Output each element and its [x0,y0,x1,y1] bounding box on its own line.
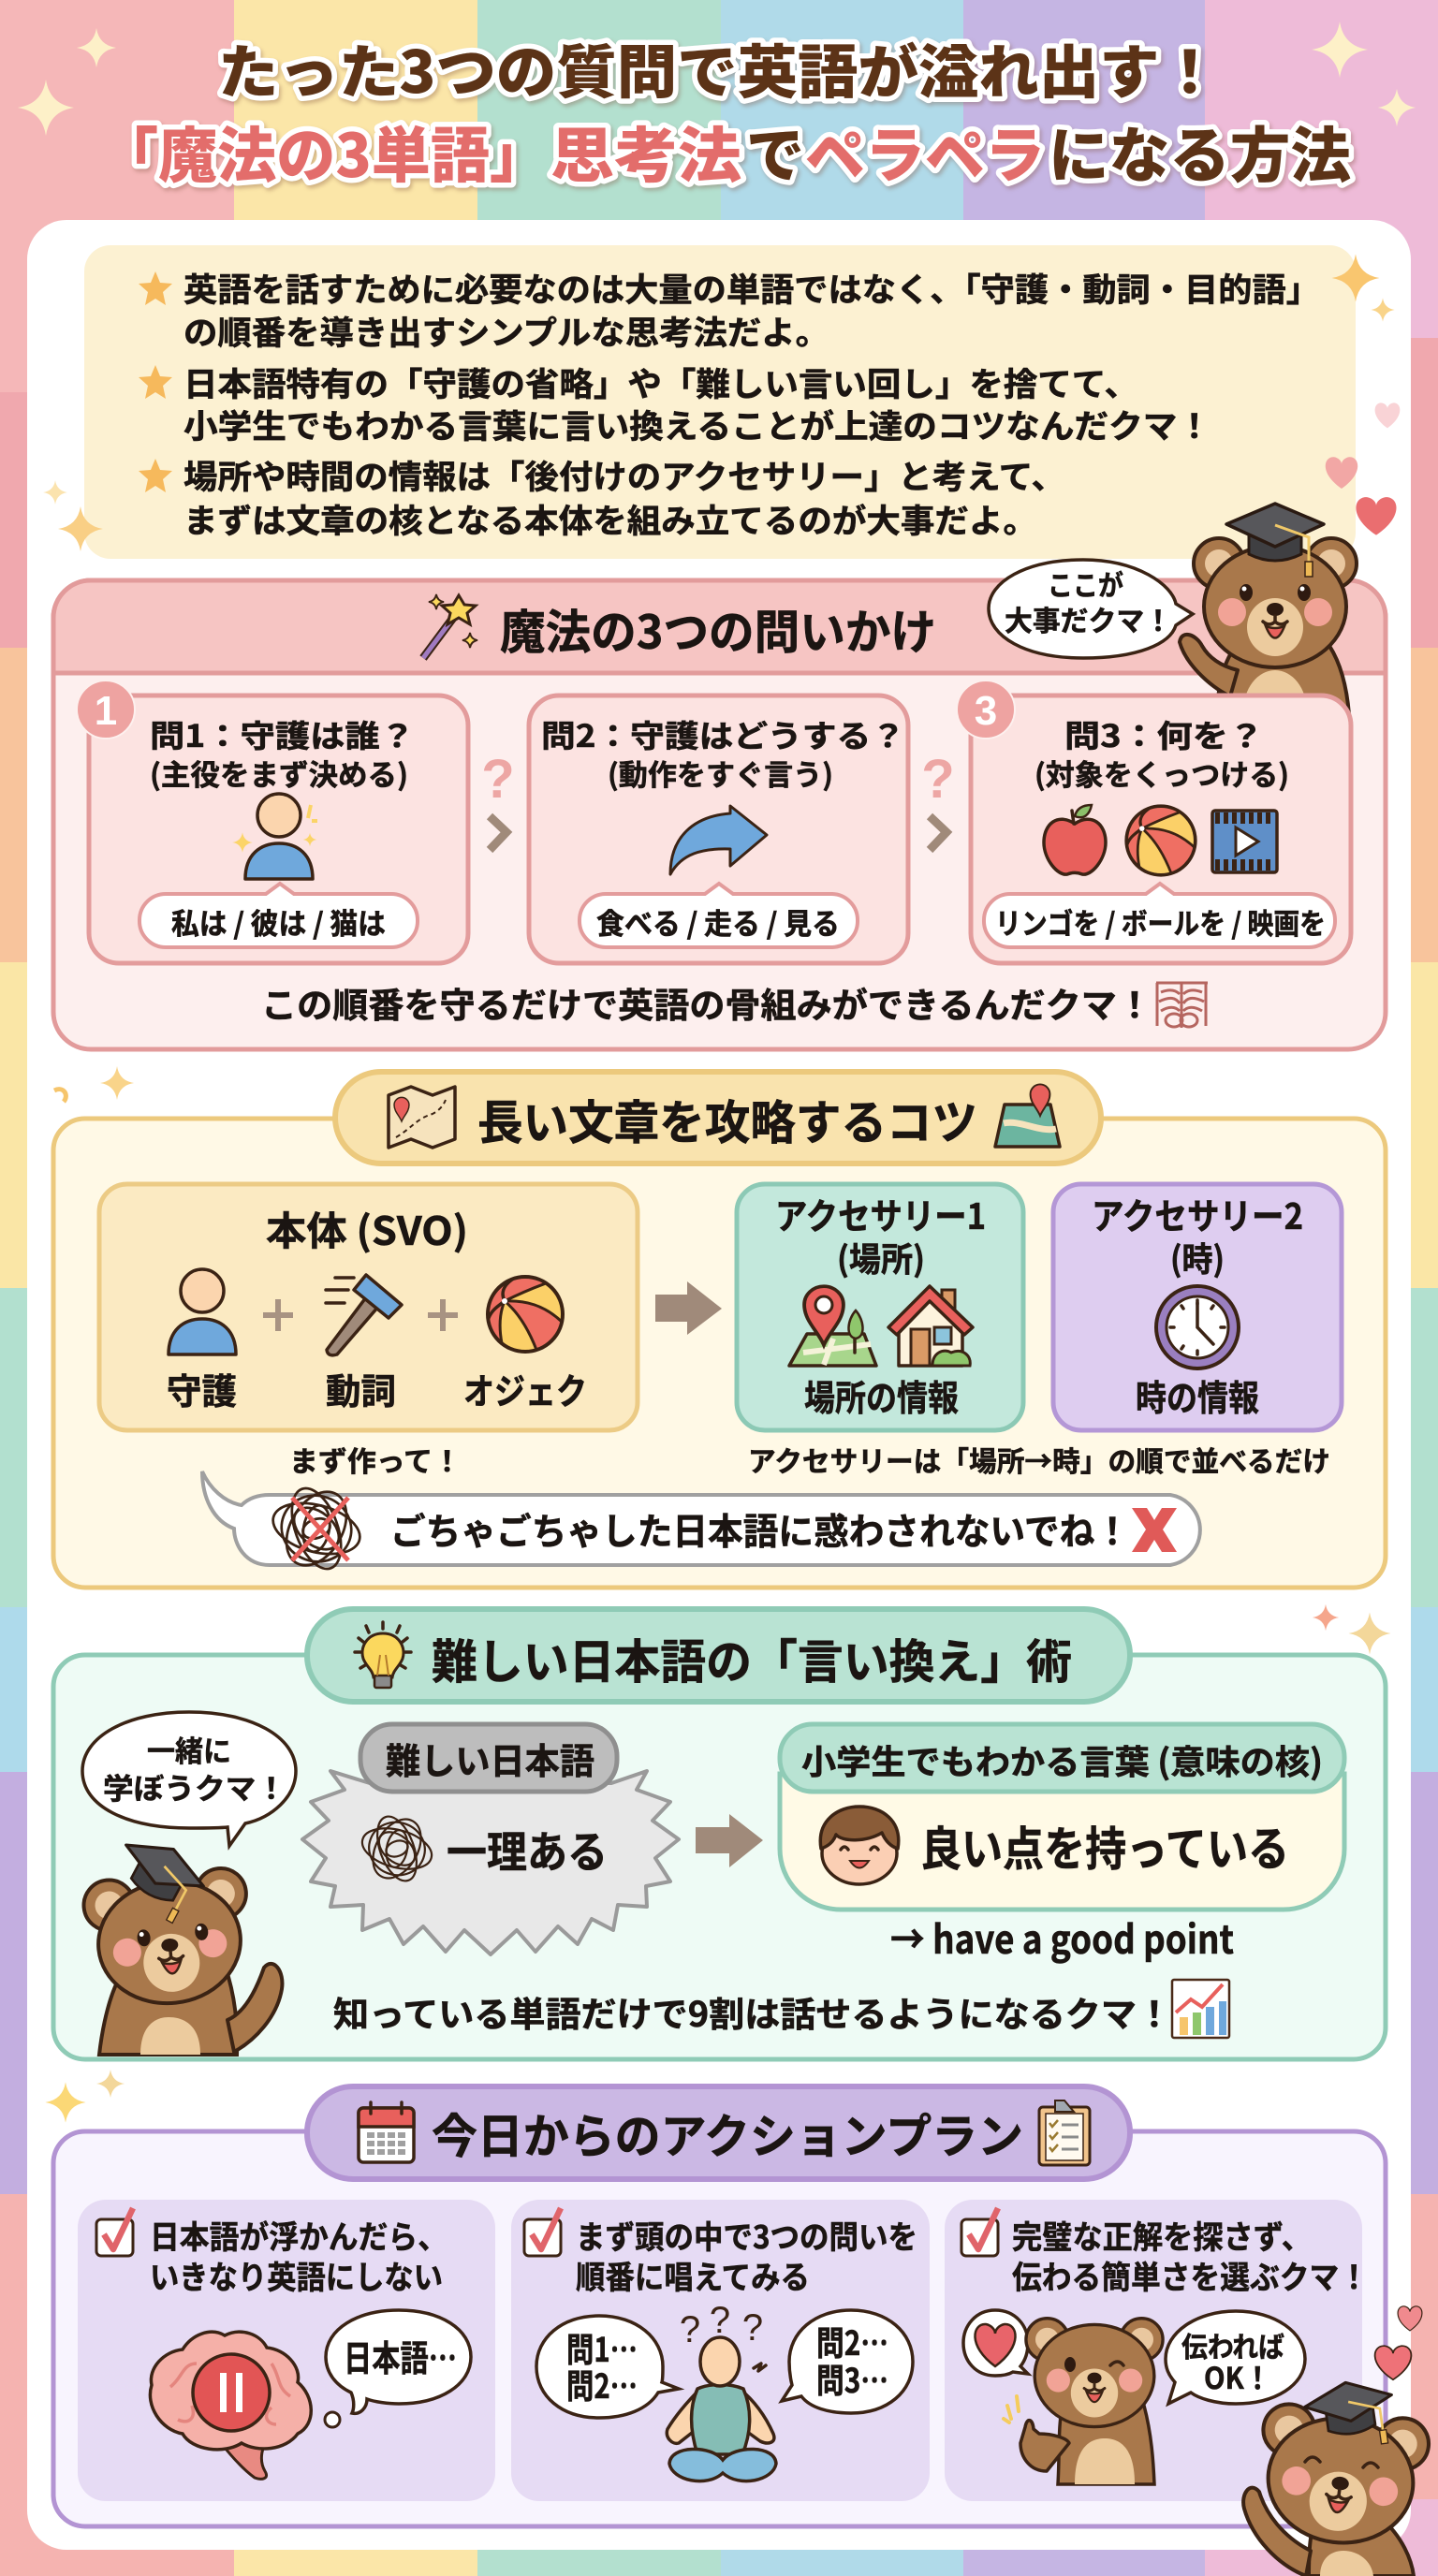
icon: meditating person [667,2300,776,2481]
icon: meditating person: ? [742,2307,763,2349]
icon: crossed tangle [268,1481,365,1576]
icon: skeleton [1156,983,1208,1028]
card: question 1 [77,681,468,963]
heart bubble [963,2310,1028,2376]
answer pill: 私は / 彼は / 猫は [171,900,386,943]
bear 4 [1004,2319,1163,2484]
icon: child face [820,1807,899,1884]
card: action 1: いきなり英語にしない [150,2252,443,2298]
speech callout: tangled japanese [202,1471,1200,1576]
bubble right [782,2310,913,2413]
bullet 1: 英語を話すために必要なのは大量の単語ではなく、「守護・動詞・目的語」 [183,264,1320,312]
icon: red x [1132,1508,1177,1552]
icon: folded map [389,1087,455,1148]
question text: 問1：守護は誰？ [150,711,415,756]
number badge 1 [77,681,135,739]
card: action 2: 順番に唱えてみる [576,2252,810,2298]
arrow: body to accessory [655,1281,722,1335]
title: たった3つの質問で英語が溢れ出す！ [218,25,1220,110]
speech bubble: ここが大事だクマ: ここが [1048,563,1123,604]
thought bubble [325,2310,471,2427]
bubble: OK: 伝われば [1181,2324,1284,2365]
connector 2: ? [921,749,955,810]
english phrase: → have a good point [890,1909,1234,1966]
connector 1: ? [481,749,515,810]
panel 3 takeaway: 知っている単語だけで9割は話せるようになるクマ！ [333,1986,1172,2037]
question text: 問2：守護はどうする？ [541,711,905,756]
action text: 完璧な正解を探さず、 [1012,2212,1312,2258]
labels: 守護 [167,1363,237,1414]
panel: rephrasing [53,1609,1386,2059]
box: main body SVO [99,1184,638,1430]
box: accessory 2 time: (時) [1170,1233,1225,1281]
floating hearts [1375,2306,1422,2379]
speech bubble: ここが大事だクマ: 大事だクマ！ [1005,598,1172,639]
easy word box: 良い点を持っている [920,1812,1289,1880]
icon: meditating person: ? [680,2309,700,2350]
pill: difficult japanese [360,1724,617,1792]
box: accessory 2 time: アクセサリー2 [1092,1188,1303,1239]
icon: subject person [169,1269,236,1354]
spiky burst: difficult word: 一理ある [447,1819,608,1881]
answer pill: 食べる / 走る / 見る [596,900,840,943]
bullet 2 [139,359,1211,448]
decorative sparkle and swirl [54,1066,134,1102]
bullet 3: 場所や時間の情報は「後付けのアクセサリー」と考えて、 [183,451,1065,499]
icon: meditating person: ? [710,2300,730,2341]
icon: checkbox [961,2208,998,2256]
panel: action plan [53,2086,1386,2526]
speech bubble: learn together: 一緒に [147,1728,231,1770]
icon: tangle [358,1811,436,1886]
panel: long sentences [53,1072,1386,1588]
thought bubble: 日本語… [344,2330,457,2381]
card: action 3: 伝わる簡単さを選ぶクマ！ [1012,2252,1369,2298]
sparkles and hearts around summary [43,255,1400,551]
note: make first: まず作って！ [289,1439,462,1480]
panel heading: 魔法の3つの問いかけ [500,595,936,663]
decorative sparkles [1313,1604,1391,1655]
header pill [307,2086,1130,2179]
icon: growth chart [1172,1980,1229,2038]
action text: 日本語が浮かんだら、 [150,2212,448,2258]
icon: clipboard [1039,2100,1090,2165]
answer pill: リンゴを / ボールを / 映画を [995,900,1326,943]
plus [263,1299,293,1331]
answer pill [139,884,418,947]
plus [428,1299,458,1331]
heading: 今日からのアクションプラン [432,2100,1023,2167]
box: accessory 1 place [737,1184,1023,1430]
icon: clock [1156,1286,1239,1368]
icon: hammer [326,1275,402,1355]
answer pill [580,884,858,947]
bubble left [536,2316,679,2418]
bullet 2: 日本語特有の「守護の省略」や「難しい言い回し」を捨てて、 [183,359,1138,406]
number badge 3: 3 [975,688,997,734]
bullet 3 [139,451,1065,543]
title: 「魔法の3単語」 [99,109,549,195]
icon: ball [488,1277,563,1352]
question text: 問3：何を？ [1064,711,1264,756]
bear 3 [1243,2377,1431,2576]
number badge 1: 1 [95,688,117,734]
connector 2 [921,749,955,850]
icon: checkbox [96,2208,133,2256]
bear 2 [81,1829,282,2055]
box: main body SVO: 本体 (SVO) [266,1200,468,1257]
icon: arrow [670,806,767,874]
speech bubble: learn together: 学ぼうクマ！ [103,1765,286,1808]
arrow [696,1814,763,1867]
card: question 3: (対象をくっつける) [1034,752,1289,794]
bubble right: 問3… [816,2354,888,2403]
icon: map pin [995,1084,1060,1147]
box: accessory 1 place: 場所の情報 [804,1369,959,1421]
box: accessory 2 time: 時の情報 [1136,1369,1259,1421]
box: accessory 1 place: (場所) [837,1233,925,1281]
speech callout: tangled japanese: ごちゃごちゃした日本語に惑わされないでね！ [390,1503,1130,1556]
spiky burst: difficult word [302,1724,679,1954]
icon: film [1212,811,1277,872]
bear 1 [1180,504,1357,753]
box: main body SVO: 動詞 [326,1363,396,1414]
icon: checkbox [524,2208,561,2256]
card: question 2: (動作をすぐ言う) [608,752,833,794]
pill: easy words: 小学生でもわかる言葉 (意味の核) [801,1735,1323,1784]
card: action 1 [78,2200,495,2501]
icon: light bulb [355,1622,411,1688]
connector 1 [481,749,515,850]
header pill [335,1072,1101,1164]
number badge 3 [957,681,1015,739]
heading: 長い文章を攻略するコツ [477,1086,977,1153]
panel 1 takeaway: この順番を守るだけで英語の骨組みができるんだクマ！ [261,977,1152,1028]
panel header band [53,580,1386,673]
title: ペラペラ [805,109,1045,195]
bubble left: 問1… [566,2323,638,2372]
summary box [84,245,1356,559]
panel: magic questions [53,580,1386,1049]
action text: まず頭の中で3つの問いを [576,2212,917,2258]
card: question 2 [529,695,908,963]
icon: brain with pause [150,2332,311,2479]
card: question 1: (主役をまず決める) [150,752,408,794]
bubble: OK [1166,2311,1305,2404]
bubble left: 問2… [566,2360,638,2408]
title [99,25,1351,195]
bubble: OK: OK！ [1204,2355,1271,2398]
card: action 3 [945,2200,1369,2501]
icon: pin on map [789,1286,876,1366]
pill: easy words [780,1724,1344,1792]
box: main body SVO: オジェク [463,1363,587,1414]
note: accessory order: アクセサリーは「場所→時」の順で並べるだけ [748,1439,1330,1480]
bullet 1: の順番を導き出すシンプルな思考法だよ。 [183,307,829,355]
easy word box [780,1724,1344,1910]
answer pill [984,884,1335,947]
bullet 3: まずは文章の核となる本体を組み立てるのが大事だよ。 [183,495,1037,543]
title: 思考法 [550,109,741,195]
title: で [746,109,804,195]
heading: 難しい日本語の「言い換え」術 [432,1625,1072,1692]
decorative top sparkles [18,22,1416,136]
decorative sparkles [45,2070,125,2123]
bullet 2: 小学生でもわかる言葉に言い換えることが上達のコツなんだクマ！ [183,401,1211,448]
card: question 3 [957,681,1351,963]
icon: house [888,1286,973,1366]
bubble right: 問2… [816,2317,888,2365]
box: accessory 2 time [1053,1184,1342,1430]
pill: difficult japanese: 難しい日本語 [386,1733,594,1784]
speech bubble: learn together [82,1712,296,1846]
bullet 1 [139,264,1320,355]
header pill [307,1609,1130,1702]
icon: person [232,794,317,879]
box: accessory 1 place: アクセサリー1 [775,1188,986,1239]
icon: ball [1126,806,1196,875]
icon: magic wand [423,594,477,658]
title: になる方法 [1049,109,1351,195]
speech bubble: ここが大事だクマ [989,560,1193,658]
icon: apple [1044,805,1106,874]
icon: calendar [359,2102,414,2162]
card: action 2 [511,2200,930,2501]
